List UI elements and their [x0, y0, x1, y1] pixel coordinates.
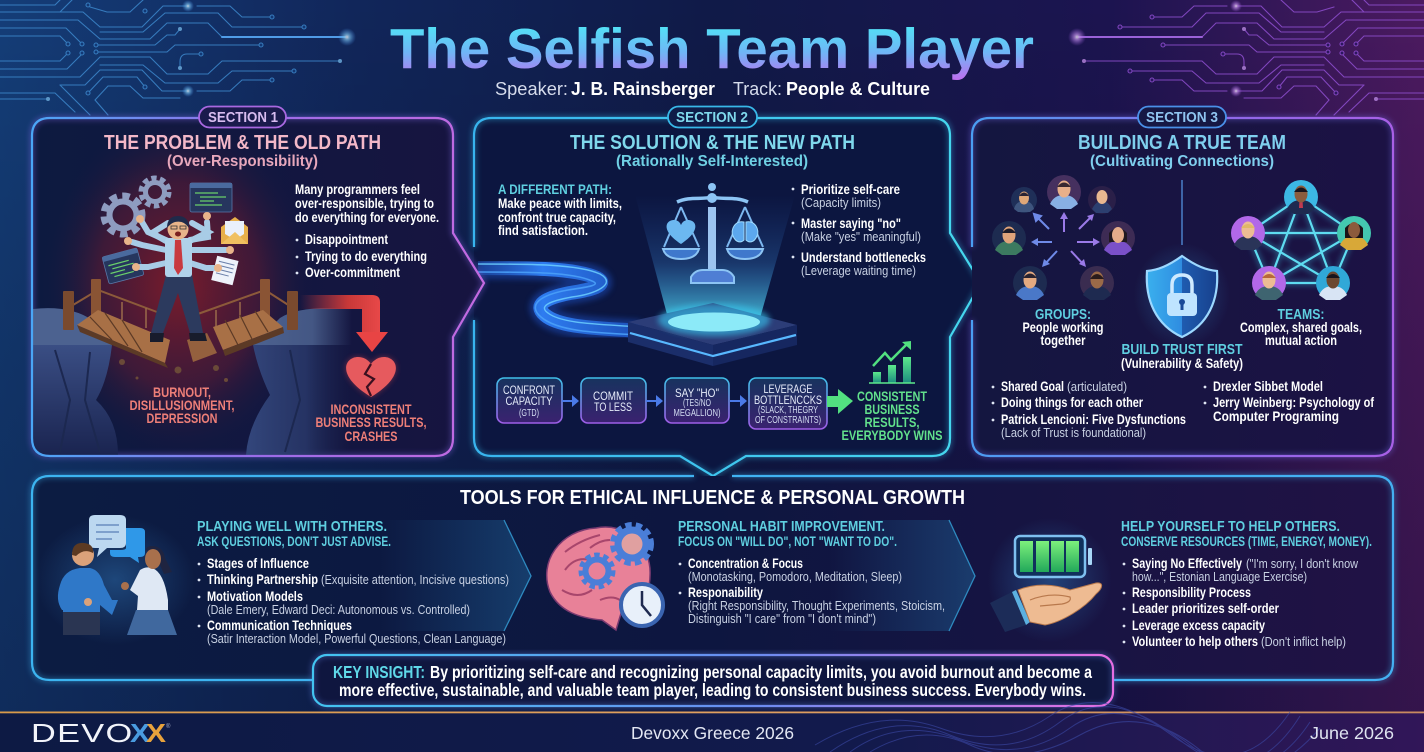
bullet list: symptoms: Disappointment: [305, 231, 388, 247]
step: leverage bottlenecks: OF CONSTRAINTS): [755, 415, 821, 426]
step: leverage bottlenecks: LEVERAGE: [764, 382, 812, 396]
label: burnout: DEPRESSION: [146, 410, 218, 426]
text block: personal habit: Concentration & Focus: [688, 555, 803, 571]
panel: tools: [32, 476, 1393, 680]
text block: help yourself: Saying No Effectively: [1132, 555, 1242, 571]
panel: section 2: [474, 118, 981, 476]
label: groups: [1022, 307, 1104, 348]
diagram: groups: [992, 175, 1135, 348]
icon: broken heart: [346, 357, 396, 397]
bullet list: self-care: (Leverage waiting time): [801, 263, 916, 278]
icon: gears: [105, 179, 168, 233]
icon: code window left: [102, 248, 144, 284]
label: build trust: [1121, 342, 1243, 371]
step: say no: SAY "HO": [675, 386, 719, 400]
speaker and track line: People & Culture: [786, 78, 930, 99]
logo: devoxx: X: [130, 718, 151, 748]
bullet list: symptoms: [296, 231, 427, 280]
bullet list: team right: [1204, 378, 1374, 424]
bullet list: team left: Doing things for each other: [1001, 394, 1143, 410]
red glow: [43, 115, 313, 455]
illustration: overloaded programmer: [124, 212, 234, 342]
step: commit to less: [581, 378, 646, 423]
light cone: [635, 195, 795, 318]
text block: intro: over-responsible, trying to: [295, 195, 434, 211]
text block: playing well: ASK QUESTIONS, DON'T JUST ADVISE.: [197, 534, 391, 549]
text block: help yourself: HELP YOURSELF TO HELP OTHERS.: [1121, 518, 1340, 535]
label: groups: together: [1040, 332, 1086, 348]
callout: consistent results: [842, 388, 942, 443]
arrow: down to heart: [300, 295, 388, 352]
bullet list: self-care: Understand bottlenecks: [801, 249, 926, 265]
title: The Selfish Team Player: [390, 17, 1034, 81]
step: say no: [665, 378, 729, 423]
text block: playing well: (Dale Emery, Edward Deci: Autonomous vs. Controlled): [207, 602, 470, 617]
man: [58, 568, 118, 635]
panel: section 1: [32, 115, 484, 456]
callout: key insight: By prioritizing self-care and recognizing personal capacity limits, you avoid burnout and become a: [430, 662, 1092, 682]
text block: help yourself: ("I'm sorry, I don't know: [1246, 556, 1359, 571]
section pill 3: SECTION 3: [1146, 110, 1218, 126]
label: build trust: (Vulnerability & Safety): [1121, 355, 1243, 371]
text block: a different path: A DIFFERENT PATH:: [498, 181, 612, 197]
section pill 3: [1138, 106, 1226, 128]
pentagon links: [1248, 197, 1354, 283]
speaker and track line: Track:: [733, 78, 782, 99]
callout: consistent results: BUSINESS: [864, 401, 920, 417]
subheading: (Rationally Self-Interested): [616, 153, 808, 170]
text block: personal habit: Responaibility: [688, 584, 763, 600]
bullet list: team right: Drexler Sibbet Model: [1213, 378, 1323, 394]
text block: personal habit: PERSONAL HABIT IMPROVEMENT.: [678, 518, 885, 535]
text block: personal habit: (Monotasking, Pomodoro, Meditation, Sleep): [688, 569, 902, 584]
bullet list: self-care: (Capacity limits): [801, 195, 881, 210]
section pill 2: [668, 106, 757, 128]
icon: paper: [211, 256, 239, 285]
bullet list: team left: [992, 378, 1186, 440]
label: inconsistent results: CRASHES: [344, 428, 398, 444]
divider line: [1181, 180, 1183, 245]
step: leverage bottlenecks: (SLACK, THEGRY: [758, 405, 818, 416]
text block: intro: do everything for everyone.: [295, 209, 439, 225]
text block: intro: Many programmers feel: [295, 181, 420, 197]
callout: key insight: more effective, sustainable, and valuable team player, leading to consistent business success. Everybody wins.: [339, 680, 1086, 700]
step: confront capacity: CAPACITY: [506, 394, 552, 408]
chevron backgrounds: [380, 520, 975, 631]
heading: BUILDING A TRUE TEAM: [1078, 131, 1286, 154]
step: confront capacity: [497, 378, 562, 423]
speaker and track line: J. B. Rainsberger: [571, 78, 715, 99]
text block: playing well: Motivation Models: [207, 588, 303, 604]
date: June 2026: [1310, 723, 1394, 743]
illustration: two people talking: [35, 515, 195, 645]
icon: balance scale: [663, 183, 763, 283]
text block: a different path: confront true capacity,: [498, 209, 616, 225]
text block: help yourself: Leader prioritizes self-order: [1132, 600, 1279, 616]
text block: intro: [295, 181, 439, 225]
footer: [0, 703, 1424, 752]
icon: growth chart: [869, 341, 915, 383]
callout: key insight: [313, 655, 1113, 706]
step: confront capacity: (GTD): [519, 408, 539, 419]
text block: personal habit: FOCUS ON "WILL DO", NOT "WANT TO DO".: [678, 534, 897, 549]
section stroke: [32, 118, 484, 456]
text block: personal habit: [678, 518, 945, 626]
section pill 2: SECTION 2: [676, 110, 748, 126]
footer waves: [815, 703, 1320, 752]
text block: personal habit: Distinguish "I care" from "I don't mind"): [688, 611, 876, 626]
icon: shield with lock: [1134, 243, 1230, 347]
text block: playing well: (Exquisite attention, Incisive questions): [321, 572, 509, 587]
bullet list: team right: Computer Programing: [1213, 408, 1339, 424]
cliffs: [33, 308, 352, 455]
label: teams: Complex, shared goals,: [1240, 319, 1362, 335]
text block: playing well: PLAYING WELL WITH OTHERS.: [197, 518, 387, 535]
label: teams: mutual action: [1265, 332, 1337, 348]
step: say no: MEGALLION): [674, 408, 720, 419]
bullet list: team left: (Lack of Trust is foundational): [1001, 425, 1146, 440]
heading: TOOLS FOR ETHICAL INFLUENCE & PERSONAL GROWTH: [460, 486, 965, 509]
icon: envelope: [221, 217, 248, 244]
avatars: [1231, 180, 1371, 300]
logo: devoxx: DEVO: [31, 719, 134, 748]
step: confront capacity: CONFRONT: [503, 383, 556, 397]
glowing path: [478, 264, 640, 335]
text block: personal habit: (Right Responsibility, Thought Experiments, Stoicism,: [688, 598, 945, 613]
step: say no: (TES/NO: [683, 398, 711, 409]
speaker and track line: [495, 78, 930, 99]
section pill 1: [199, 106, 286, 128]
icon: code window top: [190, 183, 232, 212]
heading: THE SOLUTION & THE NEW PATH: [570, 131, 855, 154]
text block: playing well: [197, 518, 509, 646]
label: inconsistent results: BUSINESS RESULTS,: [316, 414, 426, 430]
text block: help yourself: [1121, 518, 1372, 649]
bullet list: self-care: [792, 181, 926, 278]
arrows radiating: [1031, 212, 1100, 267]
callout: consistent results: CONSISTENT: [857, 388, 927, 404]
label: burnout: BURNOUT,: [153, 384, 211, 400]
logo: devoxx: X: [146, 718, 167, 748]
subheading: (Cultivating Connections): [1090, 153, 1274, 170]
text block: playing well: Communication Techniques: [207, 617, 352, 633]
label: groups: GROUPS:: [1035, 307, 1091, 323]
text block: playing well: (Satir Interaction Model, Powerful Questions, Clean Language): [207, 631, 506, 646]
step: leverage bottlenecks: [749, 378, 827, 429]
panel: section 3: [972, 118, 1393, 456]
woman: [130, 567, 168, 610]
bullet list: team left: Shared Goal: [1001, 378, 1064, 394]
heading: THE PROBLEM & THE OLD PATH: [104, 131, 381, 154]
callout: consistent results: EVERYBODY WINS: [842, 427, 942, 443]
diagram: teams: [1231, 180, 1371, 348]
section pill 1: SECTION 1: [208, 110, 278, 126]
text block: help yourself: (Don't inflict help): [1261, 634, 1346, 649]
broken bridge: [63, 279, 298, 382]
arrows between steps: [562, 395, 747, 407]
logo: devoxx: ®: [166, 723, 171, 730]
text block: help yourself: Volunteer to help others: [1132, 633, 1258, 649]
speaker and track line: Speaker:: [495, 78, 568, 99]
icon: battery on hand: [988, 518, 1112, 642]
bullet list: self-care: (Make "yes" meaningful): [801, 229, 921, 244]
label: inconsistent results: [316, 401, 426, 444]
circuit pattern left: [0, 0, 356, 115]
label: teams: TEAMS:: [1278, 307, 1324, 323]
label: burnout: [130, 384, 234, 426]
step: commit to less: TO LESS: [594, 400, 632, 414]
text block: help yourself: how...", Estonian Language Exercise): [1132, 569, 1307, 584]
bullet list: self-care: Prioritize self-care: [801, 181, 900, 197]
text block: help yourself: Leverage excess capacity: [1132, 617, 1265, 633]
text block: a different path: find satisfaction.: [498, 222, 588, 238]
text block: a different path: Make peace with limits,: [498, 195, 622, 211]
text block: playing well: Stages of Influence: [207, 555, 309, 571]
text block: playing well: Thinking Partnership: [207, 571, 318, 587]
flow: steps: [497, 378, 853, 429]
label: teams: [1240, 307, 1362, 348]
bullet list: team left: (articulated): [1067, 379, 1127, 394]
label: burnout: DISILLUSIONMENT,: [130, 397, 234, 413]
text block: help yourself: Responsibility Process: [1132, 584, 1251, 600]
bullet list: symptoms: Trying to do everything: [305, 248, 427, 264]
bullet list: symptoms: Over-commitment: [305, 264, 400, 280]
text block: a different path: [498, 181, 622, 238]
platform: [628, 303, 797, 366]
speech bubbles: [89, 515, 145, 563]
label: groups: People working: [1022, 319, 1104, 335]
event name: Devoxx Greece 2026: [631, 723, 794, 743]
label: build trust: BUILD TRUST FIRST: [1122, 342, 1243, 358]
circuit pattern right: [1068, 0, 1424, 115]
label: inconsistent results: INCONSISTENT: [330, 401, 412, 417]
step: leverage bottlenecks: BOTTLENCCKS: [754, 393, 822, 407]
subheading: (Over-Responsibility): [167, 153, 318, 170]
step: commit to less: COMMIT: [593, 389, 634, 403]
callout: key insight: KEY INSIGHT:: [333, 662, 425, 682]
arrow: green: [827, 389, 853, 414]
bullet list: team left: Patrick Lencioni: Five Dysfunctions: [1001, 411, 1186, 427]
bullet list: self-care: Master saying "no": [801, 215, 901, 231]
avatars: [992, 175, 1135, 300]
icon: brain with gears and clock: [547, 526, 663, 630]
bullet list: team right: Jerry Weinberg: Psychology of: [1213, 394, 1374, 410]
callout: consistent results: RESULTS,: [864, 414, 920, 430]
